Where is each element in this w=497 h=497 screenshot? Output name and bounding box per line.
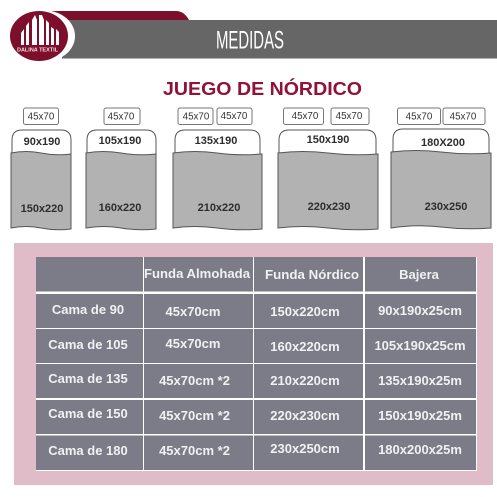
row: cama de 135: Cama de 135 — [48, 371, 128, 386]
bed diagram: cama 150: 220x230 — [308, 201, 350, 213]
pillow: 45x70 — [28, 112, 55, 122]
row: cama de 150 — [36, 400, 476, 434]
row: cama de 150: 150x190x25m — [378, 408, 462, 423]
bed diagram: cama 90: 150x220 — [21, 203, 63, 215]
row: cama de 105: 105x190x25cm — [374, 338, 466, 353]
row: cama de 180: Cama de 180 — [48, 443, 128, 458]
row: cama de 90 — [36, 294, 476, 328]
bed diagram: cama 105: 160x220 — [99, 202, 141, 214]
pillows: 45x70 — [450, 112, 477, 122]
pillows — [178, 108, 252, 124]
row: cama de 105 — [36, 329, 476, 363]
banner title: MEDIDAS — [216, 26, 284, 54]
row: cama de 150: 45x70cm *2 — [159, 408, 230, 423]
pillows: 45x70 — [183, 112, 210, 122]
heading: JUEGO DE NÓRDICO — [163, 78, 362, 99]
panel: size table — [14, 243, 493, 485]
row: cama de 135 — [36, 364, 476, 398]
table header row: Funda Nórdico — [265, 267, 359, 282]
row: cama de 105: 160x220cm — [270, 339, 340, 354]
bed diagram: cama 150 — [278, 108, 378, 230]
pillow: 45x70 — [108, 112, 135, 122]
bed diagram: cama 180 — [391, 108, 491, 229]
row: cama de 150: 220x230cm — [270, 408, 340, 423]
bed diagram: cama 105: 105x190 — [99, 135, 141, 147]
logo badge — [10, 10, 75, 62]
pillows: 45x70 — [221, 111, 248, 122]
row: cama de 90: 90x190x25cm — [378, 303, 462, 318]
bed diagram: cama 90 — [11, 108, 71, 230]
bed diagram: cama 105 — [86, 108, 156, 230]
bed diagram: cama 90: 90x190 — [24, 136, 60, 148]
row: cama de 180: 180x200x25m — [378, 442, 462, 457]
pillows: 45x70 — [406, 112, 433, 122]
bed diagram: cama 180: 180X200 — [421, 137, 465, 149]
bed diagram: cama 150: 150x190 — [307, 134, 349, 146]
row: cama de 180: 230x250cm — [270, 441, 340, 456]
pillows — [398, 108, 485, 124]
pillows: 45x70 — [292, 111, 319, 122]
table header row: Bajera — [399, 267, 440, 282]
bed diagram: cama 135: 210x220 — [198, 202, 240, 214]
table header row — [36, 257, 476, 292]
row: cama de 90: 150x220cm — [270, 304, 340, 319]
bed diagram: cama 135: 135x190 — [195, 135, 237, 147]
header banner — [10, 10, 497, 62]
row: cama de 135: 135x190x25m — [378, 373, 462, 388]
bed diagram: cama 135 — [173, 108, 262, 230]
row: cama de 180: 45x70cm *2 — [159, 443, 230, 458]
row: cama de 135: 210x220cm — [270, 373, 340, 388]
row: cama de 90: Cama de 90 — [52, 302, 124, 317]
pillows: 45x70 — [336, 111, 363, 122]
row: cama de 150: Cama de 150 — [48, 406, 128, 421]
pillows — [284, 108, 369, 124]
bed diagram: cama 180: 230x250 — [425, 201, 467, 213]
row: cama de 105: 45x70cm — [166, 336, 220, 351]
table header row: Funda Almohada — [144, 266, 251, 281]
row: cama de 105: Cama de 105 — [48, 337, 128, 352]
row: cama de 90: 45x70cm — [166, 304, 220, 319]
row: cama de 180 — [36, 436, 476, 470]
row: cama de 135: 45x70cm *2 — [159, 373, 230, 388]
logo badge: DALINA TEXTIL — [17, 48, 58, 54]
